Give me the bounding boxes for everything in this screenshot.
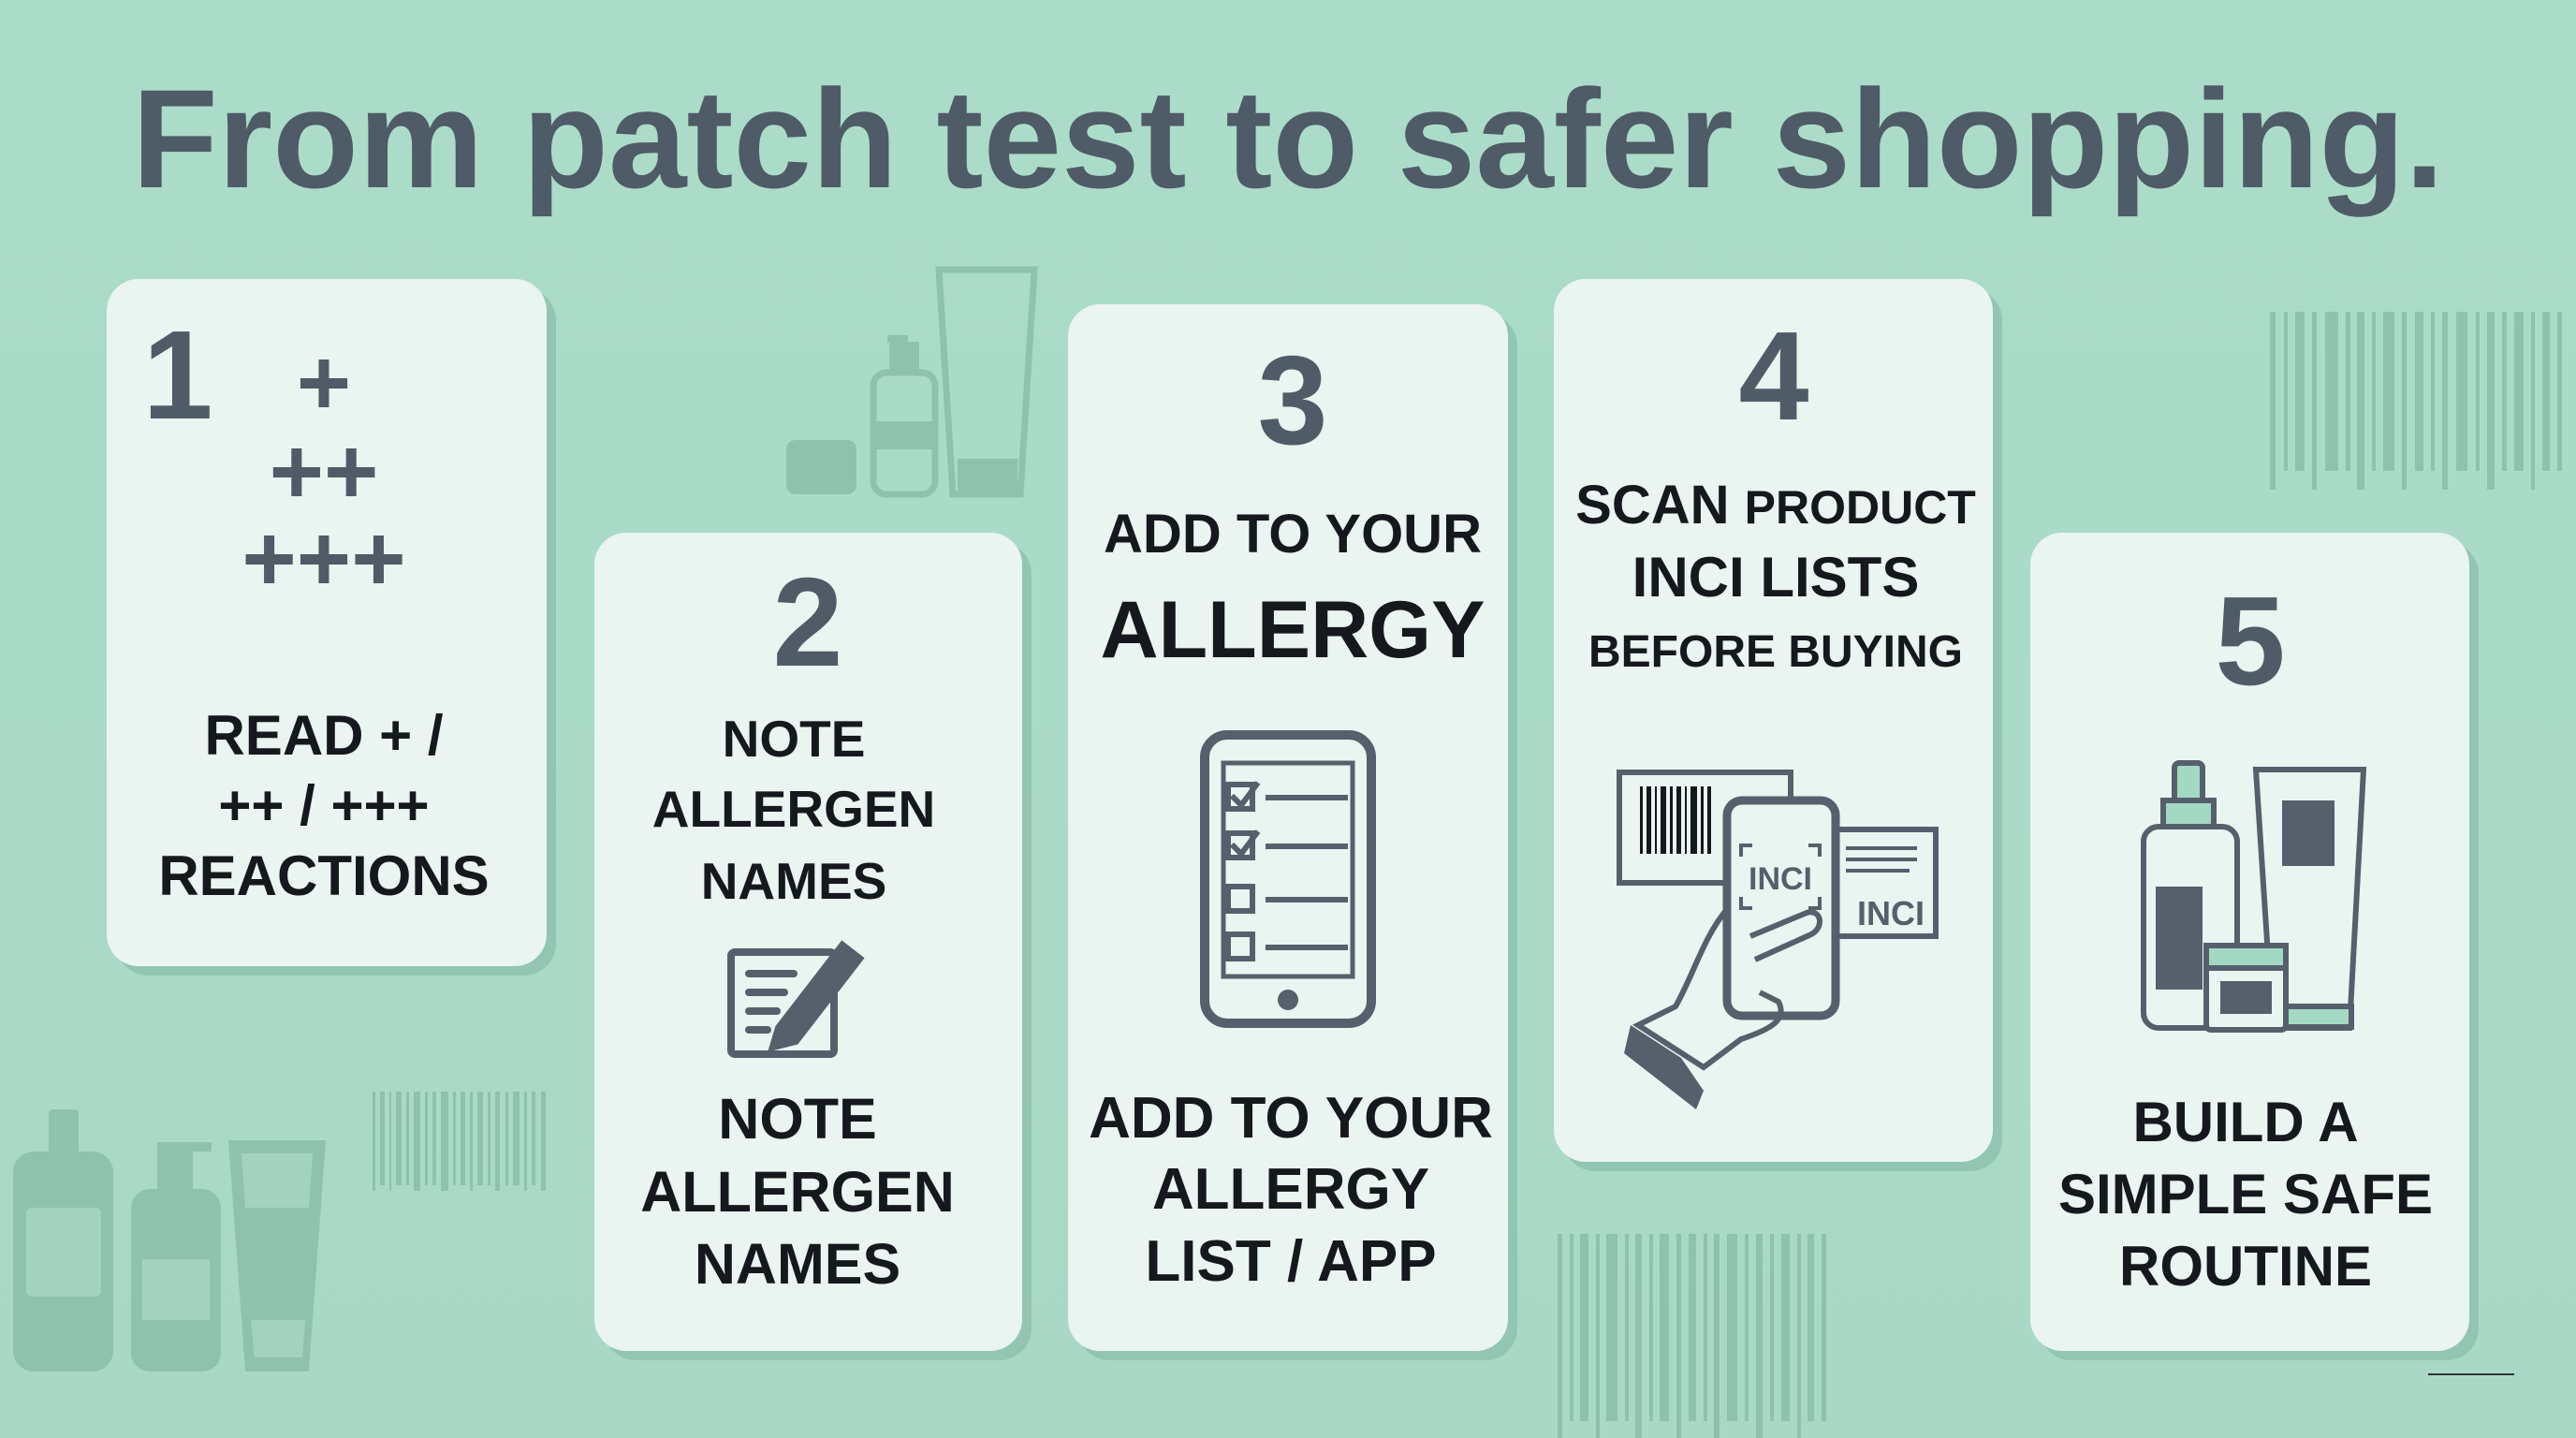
number 1: 1 xyxy=(142,304,213,446)
title: From patch test to safer shopping. xyxy=(132,60,2444,217)
icon: scanning INCI with phone xyxy=(1619,772,1936,1109)
decor: bottom-left products xyxy=(13,1109,326,1372)
icon: plus ratings: +++ xyxy=(242,506,406,611)
number 4: 4 xyxy=(1738,305,1809,447)
text: read reactions: REACTIONS xyxy=(158,844,490,907)
number 5: 5 xyxy=(2215,570,2286,712)
text: add to list/app: LIST / APP xyxy=(1145,1229,1437,1294)
number 3: 3 xyxy=(1257,330,1328,471)
text: add to list/app: ALLERGY xyxy=(1152,1157,1429,1222)
text: add to your allergy: ALLERGY xyxy=(1101,585,1485,675)
text: add to list/app: ADD TO YOUR xyxy=(1089,1086,1493,1151)
panel: step 4 xyxy=(1554,279,2002,1171)
text: scan product inci lists: SCAN PRODUCT xyxy=(1575,475,1976,536)
text: add to list/app xyxy=(1089,1086,1493,1294)
text: scan product inci lists: BEFORE BUYING xyxy=(1588,627,1963,677)
text: build a simple safe routine: BUILD A xyxy=(2132,1091,2359,1153)
panel: step 5 xyxy=(2030,533,2479,1360)
text: note allergen names lower: NOTE xyxy=(718,1087,877,1151)
decor: barcode left xyxy=(373,1092,546,1191)
icon: scanning INCI with phone: INCI xyxy=(1749,861,1812,897)
decor: barcode bottom xyxy=(1558,1234,1826,1438)
text: build a simple safe routine xyxy=(2058,1091,2433,1298)
text: add to your allergy xyxy=(1101,504,1485,675)
text: note allergen names lower: NAMES xyxy=(695,1232,900,1296)
text: build a simple safe routine: ROUTINE xyxy=(2119,1235,2372,1298)
decor: top products xyxy=(786,270,1034,494)
icon: scanning INCI with phone: INCI xyxy=(1857,894,1925,932)
text: note allergen names: NOTE xyxy=(723,710,865,768)
panel: step 1 xyxy=(107,279,556,976)
icon: plus ratings: + xyxy=(297,330,351,435)
text: scan product inci lists xyxy=(1575,475,1976,677)
text: scan product inci lists: INCI LISTS xyxy=(1632,546,1919,609)
text: note allergen names: ALLERGEN xyxy=(652,780,935,838)
text: build a simple safe routine: SIMPLE SAFE xyxy=(2058,1163,2433,1225)
icon: plus ratings: ++ xyxy=(270,419,378,524)
text: note allergen names lower: ALLERGEN xyxy=(640,1160,955,1224)
text: read reactions: ++ / +++ xyxy=(218,774,430,837)
icon: skincare products xyxy=(2144,763,2364,1030)
number 2: 2 xyxy=(772,551,843,693)
icon: plus ratings xyxy=(242,330,406,611)
panel: step 2 xyxy=(594,533,1032,1360)
panel: step 3 xyxy=(1068,304,1517,1360)
icon: notepad with pencil xyxy=(731,946,859,1054)
text: read reactions xyxy=(158,704,490,907)
text: add to your allergy: ADD TO YOUR xyxy=(1104,504,1482,565)
decor: barcode top right xyxy=(2270,312,2562,490)
icon: phone checklist xyxy=(1205,735,1371,1023)
text: note allergen names xyxy=(652,710,935,910)
text: note allergen names: NAMES xyxy=(701,852,886,910)
text: note allergen names lower xyxy=(640,1087,955,1296)
text: read reactions: READ + / xyxy=(204,704,444,767)
